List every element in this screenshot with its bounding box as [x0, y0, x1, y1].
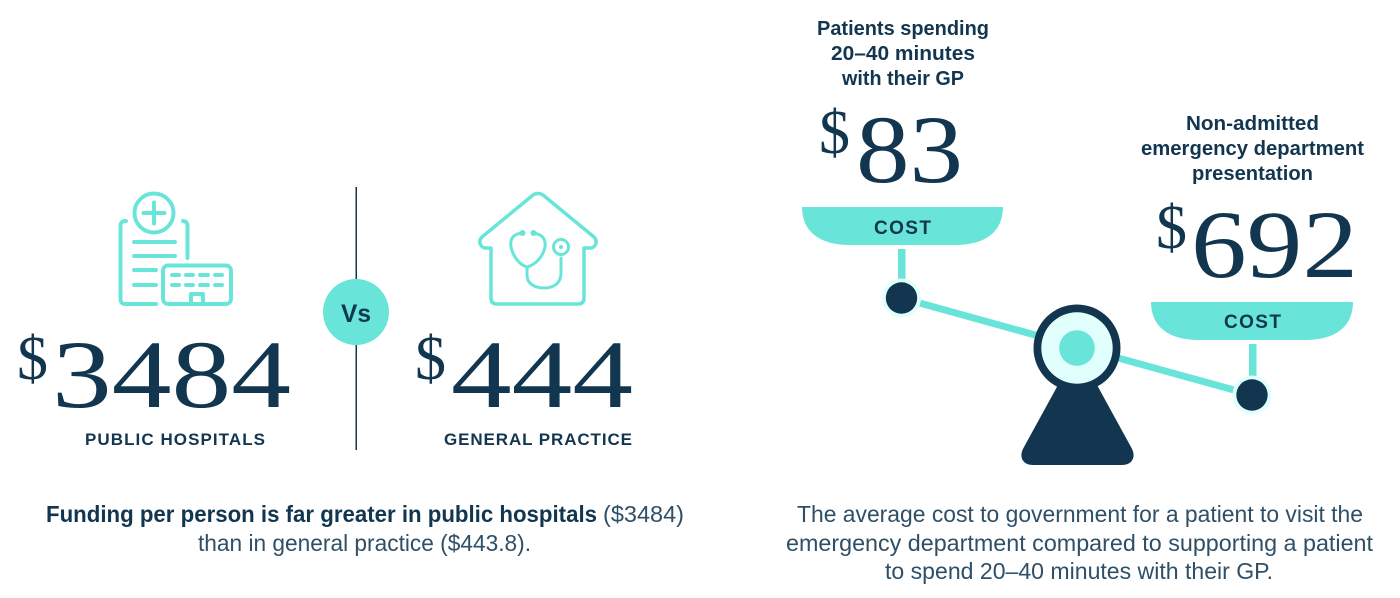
- panel: cost comparison scale: [786, 17, 1374, 584]
- right pivot knob: [1232, 376, 1272, 414]
- right pan post: [1249, 344, 1256, 378]
- right pan: [1151, 302, 1353, 340]
- amount: $3484: $: [17, 325, 48, 393]
- heading: non-admitted emergency department presentation: presentation: [1192, 162, 1313, 185]
- text: funding summary: than in general practice ($443.8).: [198, 530, 531, 556]
- panel: funding comparison: [17, 187, 684, 556]
- divider with versus badge: Vs: [341, 300, 371, 328]
- text: cost summary: emergency department compared to supporting a patient: [786, 530, 1374, 556]
- heading: non-admitted emergency department presentation: [1141, 112, 1364, 185]
- amount: $692: 692: [1191, 192, 1358, 298]
- amount: $3484: 3484: [52, 322, 291, 428]
- text: funding summary: [46, 501, 684, 556]
- right pan label: COST: [1224, 312, 1281, 333]
- left pan post: [898, 249, 906, 285]
- central pivot: [1034, 304, 1120, 392]
- icon: hospital clipboard: [120, 194, 231, 304]
- left pan: [802, 207, 1003, 245]
- text: funding summary: ($3484): [603, 501, 684, 527]
- heading: patients spending 20-40 minutes with their GP: [817, 17, 989, 90]
- heading: patients spending 20-40 minutes with their GP: Patients spending: [817, 17, 989, 40]
- text: cost summary: to spend 20–40 minutes with their GP.: [885, 558, 1273, 584]
- heading: non-admitted emergency department presentation: Non-admitted: [1186, 112, 1319, 135]
- scale beam: [902, 298, 1252, 395]
- heading: patients spending 20-40 minutes with their GP: with their GP: [841, 67, 964, 90]
- icon: house with stethoscope: [480, 194, 596, 304]
- heading: non-admitted emergency department presentation: emergency department: [1141, 137, 1364, 160]
- text: cost summary: [786, 501, 1374, 584]
- amount: $444: $: [415, 325, 446, 393]
- amount: $83: 83: [856, 96, 963, 203]
- divider with versus badge: [323, 187, 389, 450]
- text: cost summary: The average cost to government for a patient to visit the: [797, 501, 1363, 527]
- chart: balance scale: [802, 207, 1353, 465]
- left pan label: COST: [874, 218, 931, 239]
- heading: patients spending 20-40 minutes with their GP: 20–40 minutes: [831, 42, 975, 65]
- amount: $444: 444: [451, 322, 633, 428]
- amount: $692: $: [1156, 194, 1187, 262]
- left pivot knob: [882, 278, 921, 318]
- text: funding summary: Funding per person is far greater in public hospitals: [46, 501, 597, 527]
- scale stand: [1021, 385, 1134, 465]
- label: public hospitals: PUBLIC HOSPITALS: [85, 430, 265, 449]
- amount: $83: $: [819, 99, 850, 167]
- label: general practice: GENERAL PRACTICE: [444, 430, 632, 449]
